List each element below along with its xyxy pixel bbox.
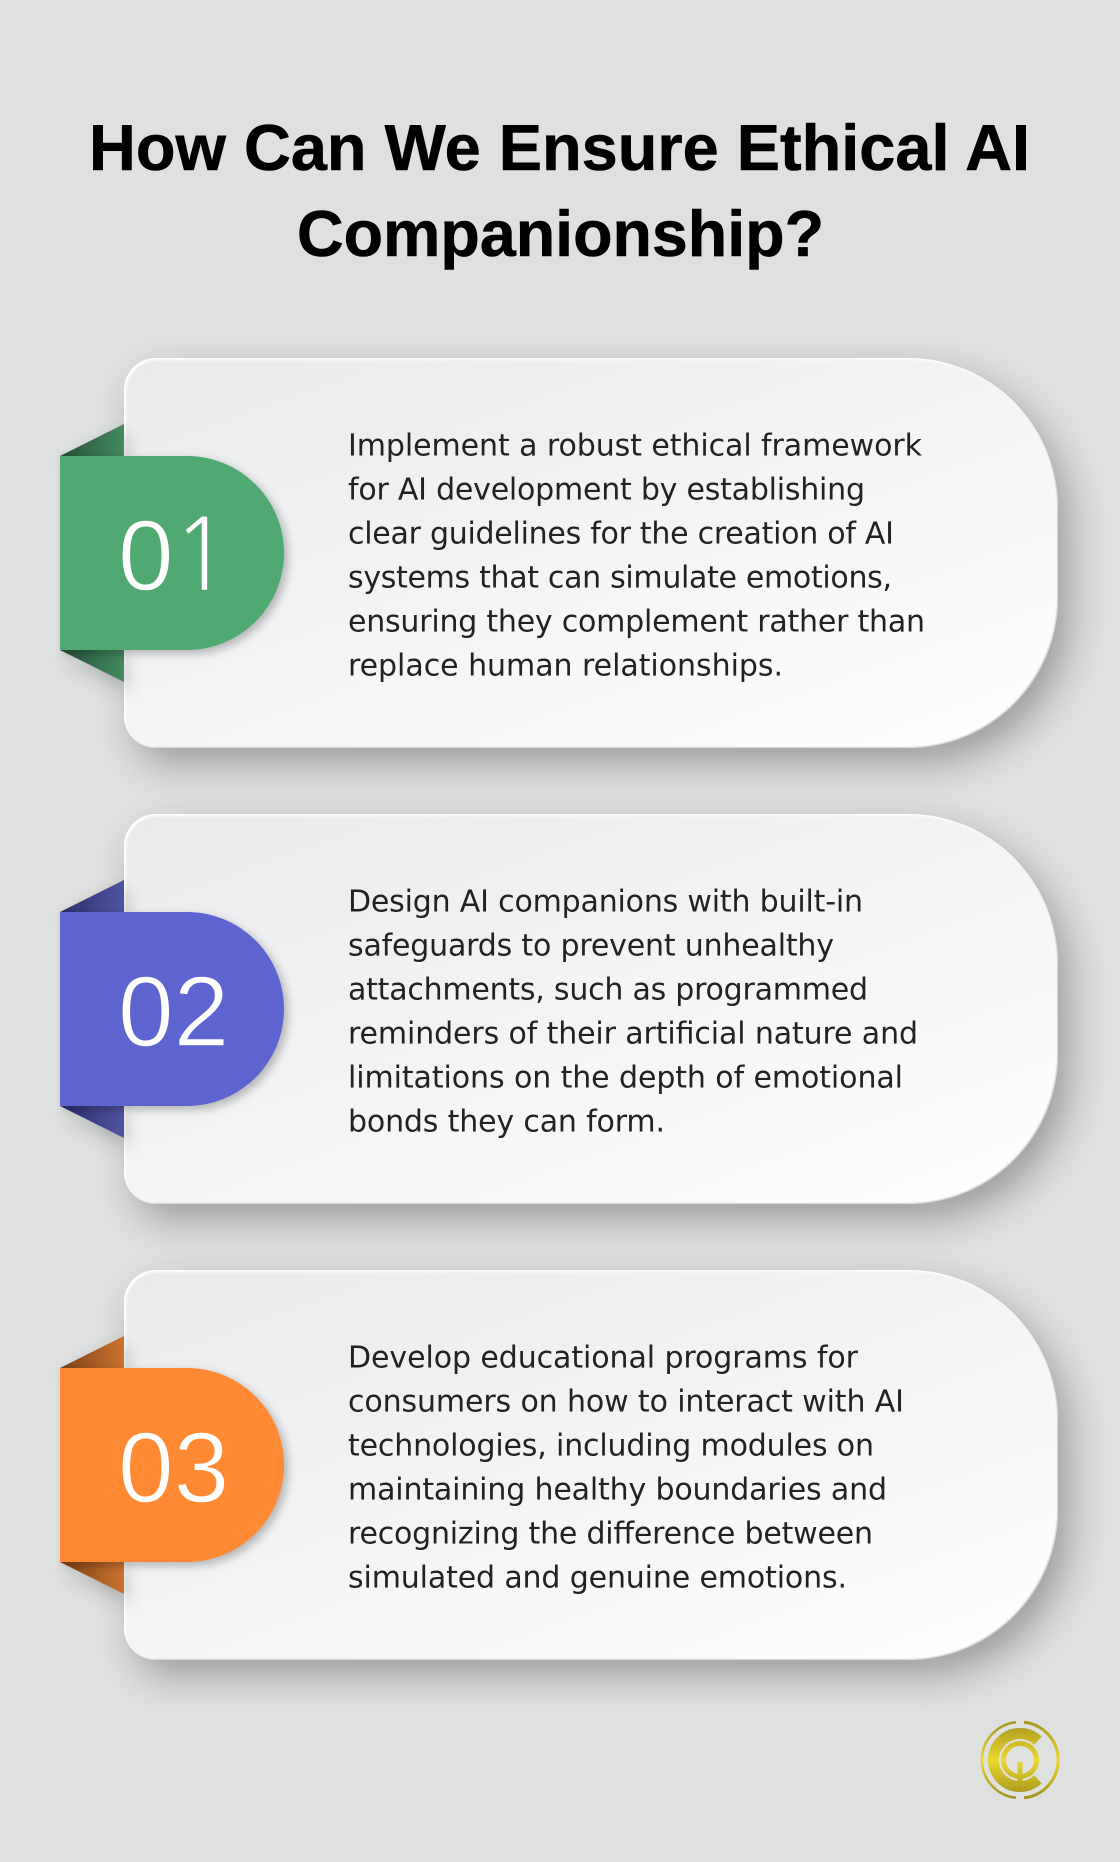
text block 01: clear guidelines for the creation of AI [348, 516, 894, 552]
text block 01: replace human relationships. [348, 648, 783, 684]
card background 02 [124, 814, 1058, 1204]
text block 01: Implement a robust ethical framework [348, 428, 923, 464]
title: Companionship? [297, 197, 824, 270]
number tab 03 [60, 1368, 284, 1562]
text block 03: simulated and genuine emotions. [348, 1560, 847, 1596]
ribbon fold 02 [60, 880, 134, 1148]
number 01: 0 [118, 500, 174, 612]
icon: gold logo [980, 1720, 1060, 1800]
text block 03 [348, 1340, 904, 1596]
text block 02: safeguards to prevent unhealthy [348, 928, 834, 964]
text block 02: bonds they can form. [348, 1104, 665, 1140]
text block 02: attachments, such as programmed [348, 972, 868, 1008]
card background 03 [124, 1270, 1058, 1660]
text block 03: maintaining healthy boundaries and [348, 1472, 887, 1508]
number tab 02 [60, 912, 284, 1106]
text block 01: systems that can simulate emotions, [348, 560, 892, 596]
number tab 01 [60, 456, 284, 650]
text block 02 [348, 884, 918, 1140]
text block 03: Develop educational programs for [348, 1340, 859, 1376]
panel: step 03 [58, 1265, 1091, 1697]
number 01 [118, 500, 232, 612]
card background 01 [124, 358, 1058, 748]
text block 03: technologies, including modules on [348, 1428, 874, 1464]
text block 03: recognizing the difference between [348, 1516, 873, 1552]
text block 01: ensuring they complement rather than [348, 604, 925, 640]
panel: step 02 [58, 809, 1091, 1241]
ribbon fold 03 [60, 1336, 134, 1604]
text block 01: for AI development by establishing [348, 472, 865, 508]
title: How Can We Ensure Ethical AI [89, 111, 1030, 184]
text block 01 [348, 428, 925, 684]
text block 03: consumers on how to interact with AI [348, 1384, 904, 1420]
title [89, 111, 1030, 270]
text block 02: Design AI companions with built-in [348, 884, 863, 920]
text block 02: reminders of their artificial nature and [348, 1016, 918, 1052]
number 03: 03 [118, 1412, 229, 1524]
panel: step 01 [58, 353, 1091, 785]
text block 02: limitations on the depth of emotional [348, 1060, 903, 1096]
number 02: 02 [118, 956, 229, 1068]
number 01: 1 [171, 505, 232, 605]
ribbon fold 01 [60, 424, 134, 692]
